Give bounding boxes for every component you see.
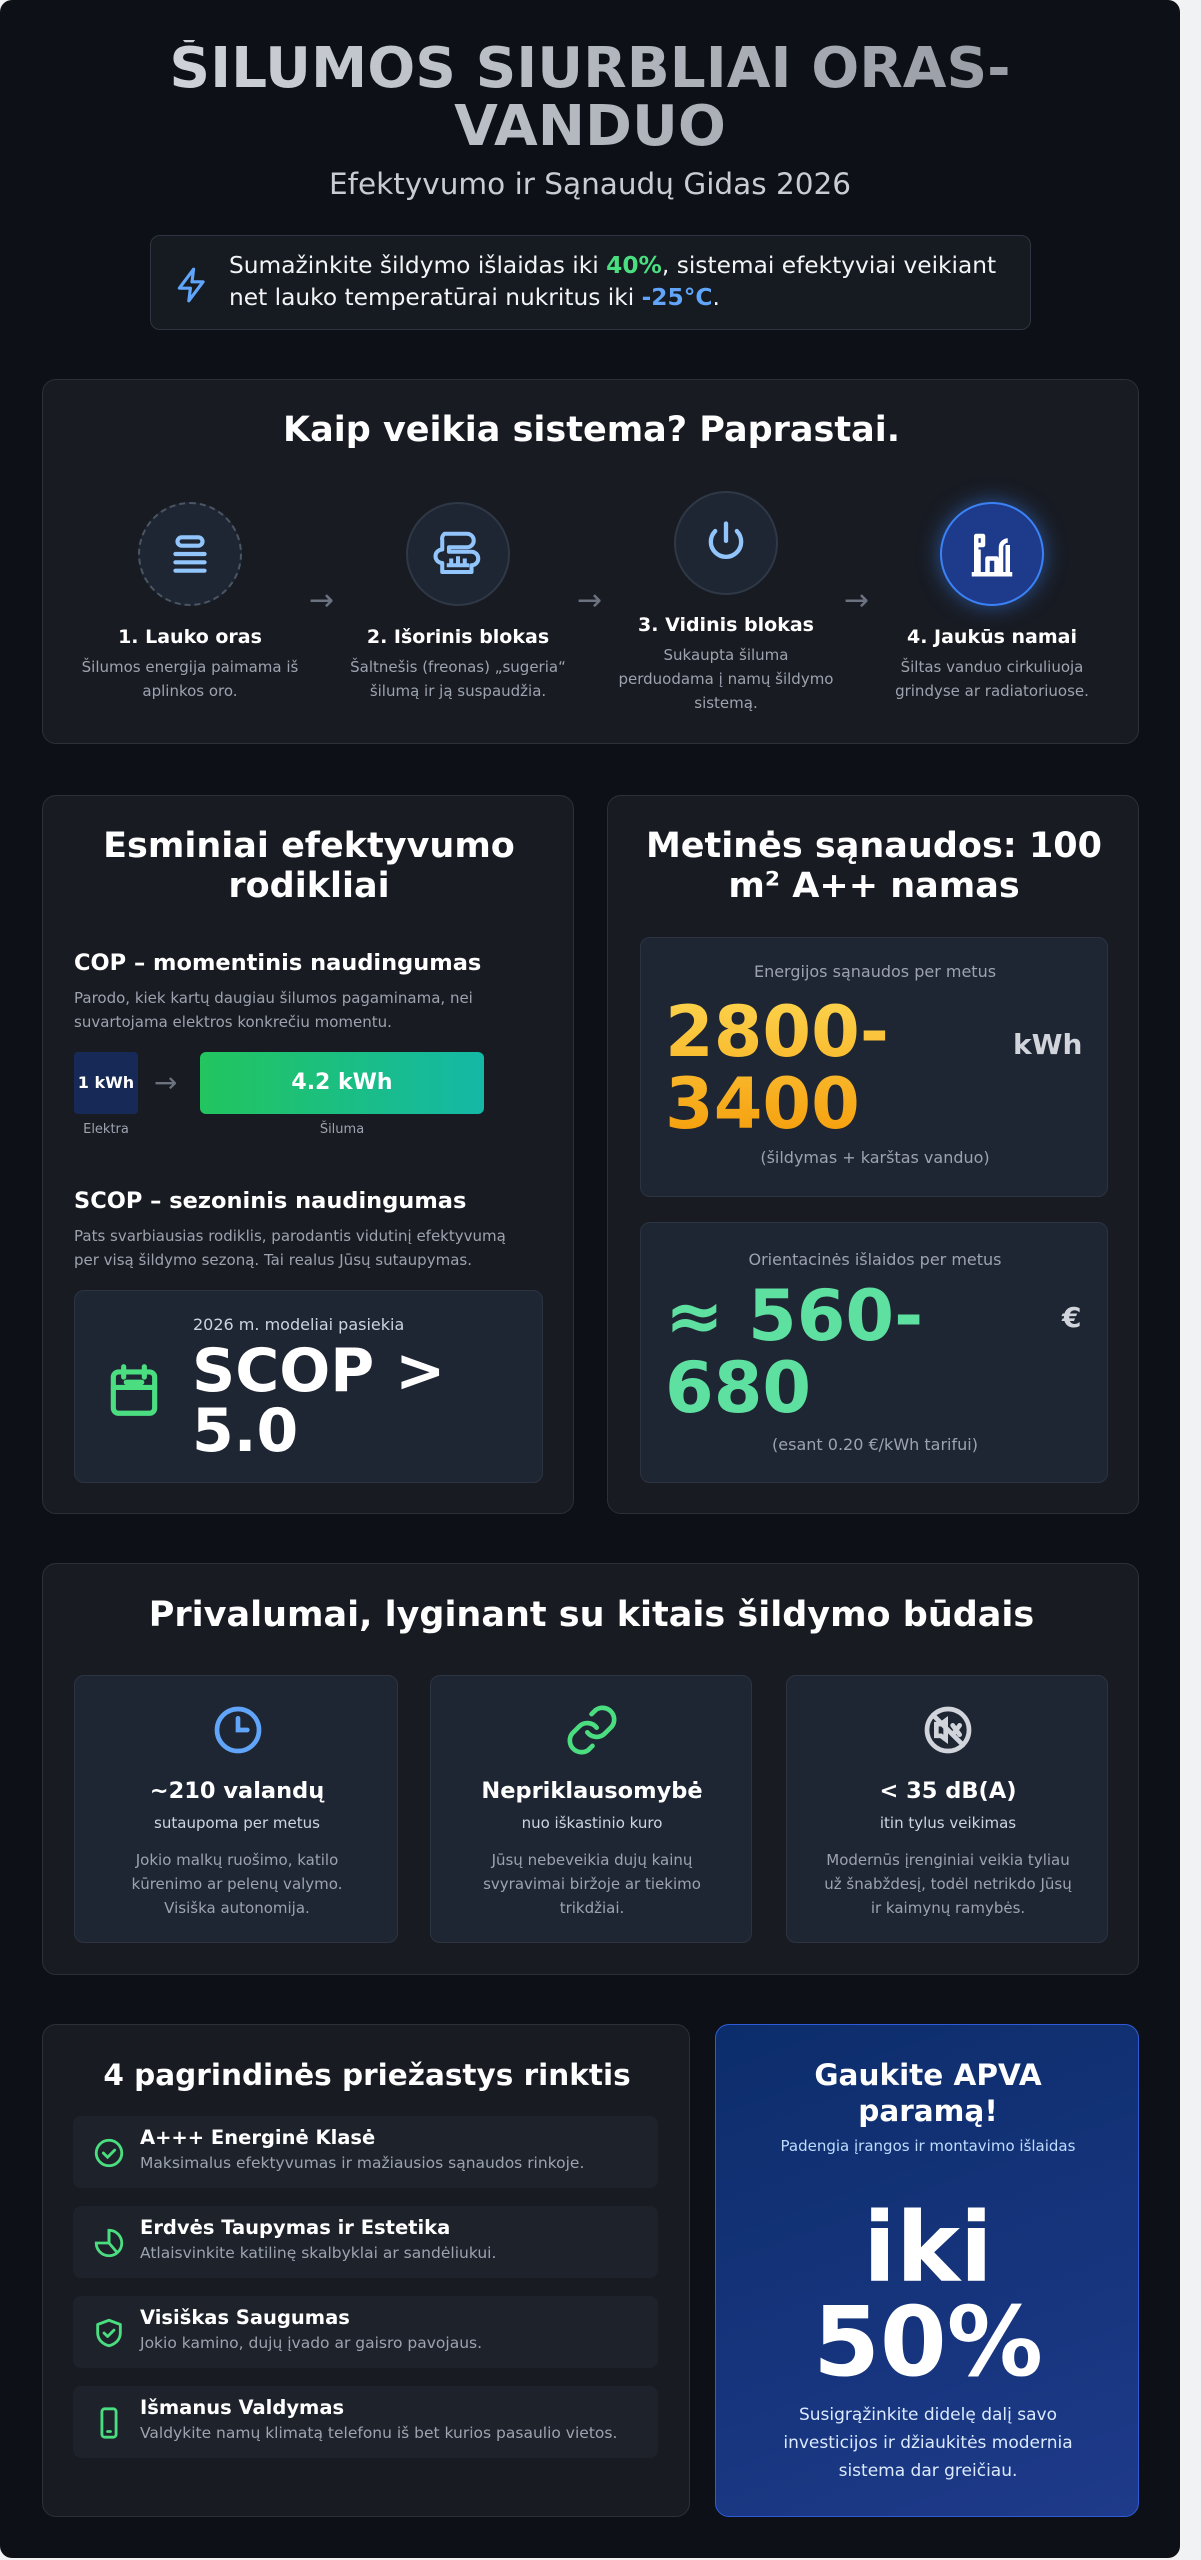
heading: rodikliai [228, 866, 390, 906]
heading: Gaukite APVA [814, 2058, 1042, 2092]
reason 1: A+++ Energinė Klasė [140, 2126, 375, 2149]
heading: Esminiai efektyvumo [103, 826, 515, 866]
SCOP block: Pats svarbiausias rodiklis, parodantis vidutinį efektyvumą per visą šildymo sezoną. Tai realus Jūsų sutaupymas. [74, 1227, 506, 1269]
card: hours: ~210 valandų [150, 1778, 324, 1804]
step text: Sukaupta šiluma perduodama į namų šildymo sistemą. [618, 646, 834, 712]
reason 3 [73, 2296, 658, 2368]
step text: Šilumos energija paimama iš aplinkos oro. [82, 658, 298, 700]
reason 1 [73, 2116, 658, 2188]
heading: m² A++ namas [728, 866, 1020, 906]
step text: Šaltnešis (freonas) „sugeria“ šilumą ir ją suspaudžia. [350, 658, 566, 700]
step text [350, 626, 566, 700]
cost card: (esant 0.20 €/kWh tarifui) [772, 1435, 978, 1454]
COP block: COP – momentinis naudingumas [74, 950, 481, 976]
step text [895, 626, 1089, 700]
SCOP card: 2026 m. modeliai pasiekia [193, 1315, 404, 1334]
card: hours: sutaupoma per metus [154, 1814, 320, 1832]
reason 1: Maksimalus efektyvumas ir mažiausios sąnaudos rinkoje. [140, 2154, 584, 2172]
big number: 50% [813, 2286, 1043, 2398]
energy card [640, 937, 1108, 1197]
icon: lightning [178, 268, 205, 302]
COP block: Parodo, kiek kartų daugiau šilumos pagaminama, nei suvartojama elektros konkrečiu momentu. [74, 989, 473, 1031]
step text: 1. Lauko oras [118, 626, 262, 648]
SCOP block: SCOP – sezoninis naudingumas [74, 1188, 466, 1214]
energy card: 2800- [665, 991, 889, 1073]
big number: iki [863, 2192, 993, 2304]
title: VANDUO [454, 94, 726, 159]
heading: paramą! [858, 2094, 998, 2128]
card: hours [74, 1675, 398, 1943]
arrow: → [309, 583, 334, 618]
COP chart [74, 1052, 484, 1137]
step 3 [618, 491, 834, 712]
reason 4: Išmanus Valdymas [140, 2396, 344, 2419]
card: independence: Nepriklausomybė [481, 1778, 703, 1804]
SCOP block [74, 1188, 506, 1269]
reason 4: Valdykite namų klimatą telefonu iš bet kurios pasaulio vietos. [140, 2424, 617, 2442]
panel: how it works [42, 379, 1139, 744]
reason 4 [73, 2386, 658, 2458]
reason 2 [73, 2206, 658, 2278]
heading: Metinės sąnaudos: 100 [646, 826, 1102, 866]
step text: Šiltas vanduo cirkuliuoja grindyse ar radiatoriuose. [895, 658, 1089, 700]
icon: air [138, 502, 242, 606]
step text: 2. Išorinis blokas [367, 626, 549, 648]
icon: phone [100, 2407, 118, 2439]
COP chart: Šiluma [320, 1122, 364, 1137]
cost card: ≈ 560- [665, 1275, 923, 1357]
icon: pie [94, 2228, 124, 2258]
COP chart: 1 kWh [78, 1073, 134, 1092]
card: independence: nuo iškastinio kuro [522, 1814, 662, 1832]
arrow: → [844, 583, 869, 618]
card: quiet [786, 1675, 1108, 1943]
panel: advantages [42, 1563, 1139, 1975]
icon: mute [924, 1706, 972, 1754]
COP chart: 4.2 kWh [291, 1070, 393, 1095]
icon: power [674, 491, 778, 595]
description: Susigrąžinkite didelę dalį savo investicijos ir džiaukitės modernia sistema dar greičiau. [783, 2405, 1073, 2481]
panel: annual consumption [607, 795, 1139, 1514]
icon: home [940, 502, 1044, 606]
SCOP card: 5.0 [192, 1396, 298, 1466]
subtitle: Efektyvumo ir Sąnaudų Gidas 2026 [329, 167, 851, 201]
icon: check [94, 2138, 124, 2168]
energy card: kWh [1013, 1028, 1082, 1061]
heading [646, 826, 1102, 906]
card: independence [430, 1675, 752, 1943]
card: independence: Jūsų nebeveikia dujų kainų svyravimai biržoje ar tiekimo trikdžiai. [483, 1851, 701, 1917]
card: quiet: itin tylus veikimas [880, 1814, 1016, 1832]
step text [618, 614, 834, 712]
step text: 4. Jaukūs namai [907, 626, 1077, 648]
reason 2: Atlaisvinkite katilinę skalbyklai ar sandėliukui. [140, 2244, 496, 2262]
icon: shield [96, 2318, 122, 2348]
energy card: 3400 [665, 1063, 860, 1145]
cost card: 680 [665, 1347, 811, 1429]
cost card: Orientacinės išlaidos per metus [748, 1250, 1002, 1269]
SCOP card: SCOP > [192, 1336, 445, 1406]
icon: calendar [110, 1364, 158, 1416]
step text: 3. Vidinis blokas [638, 614, 814, 636]
reason 3: Visiškas Saugumas [140, 2306, 350, 2329]
reason 2: Erdvės Taupymas ir Estetika [140, 2216, 450, 2239]
card: hours: Jokio malkų ruošimo, katilo kūrenimo ar pelenų valymo. Visiška autonomija. [132, 1851, 342, 1917]
card: quiet: Modernūs įrenginiai veikia tyliau už šnabždesį, todėl netrikdo Jūsų ir kaimynų ramybės. [824, 1851, 1072, 1917]
heading: 4 pagrindinės priežastys rinktis [103, 2058, 631, 2092]
SCOP card [74, 1290, 543, 1483]
COP block [74, 950, 481, 1031]
subheading: Padengia įrangos ir montavimo išlaidas [781, 2137, 1075, 2155]
arrow: → [577, 583, 602, 618]
cost card [640, 1222, 1108, 1483]
heading [814, 2058, 1042, 2128]
step 4 [895, 488, 1089, 700]
cost card: € [1062, 1301, 1081, 1334]
COP chart: Elektra [83, 1122, 129, 1137]
title: ŠILUMOS SIURBLIAI ORAS- [169, 36, 1011, 101]
title [0, 40, 1180, 156]
step 2 [350, 502, 566, 700]
panel: APVA support [715, 2024, 1139, 2517]
COP chart: → [154, 1066, 177, 1099]
panel: 4 reasons [42, 2024, 690, 2517]
callout text: Sumažinkite šildymo išlaidas iki 40%, sistemai efektyviai veikiant net lauko temperatūrai nukritus iki -25°C. [229, 252, 996, 311]
panel: efficiency metrics [42, 795, 574, 1514]
big number [813, 2192, 1043, 2398]
icon: link [568, 1706, 616, 1754]
heading: Privalumai, lyginant su kitais šildymo būdais [149, 1595, 1034, 1635]
step text [82, 626, 298, 700]
heading: Kaip veikia sistema? Paprastai. [283, 410, 900, 450]
energy card: (šildymas + karštas vanduo) [760, 1148, 990, 1167]
reason 3: Jokio kamino, dujų įvado ar gaisro pavojaus. [140, 2334, 482, 2352]
card: quiet: < 35 dB(A) [879, 1778, 1017, 1804]
icon: outdoor unit [406, 502, 510, 606]
icon: clock [214, 1706, 262, 1754]
step 1 [82, 502, 298, 700]
energy card: Energijos sąnaudos per metus [754, 962, 996, 981]
heading [103, 826, 515, 906]
callout [150, 235, 1031, 330]
